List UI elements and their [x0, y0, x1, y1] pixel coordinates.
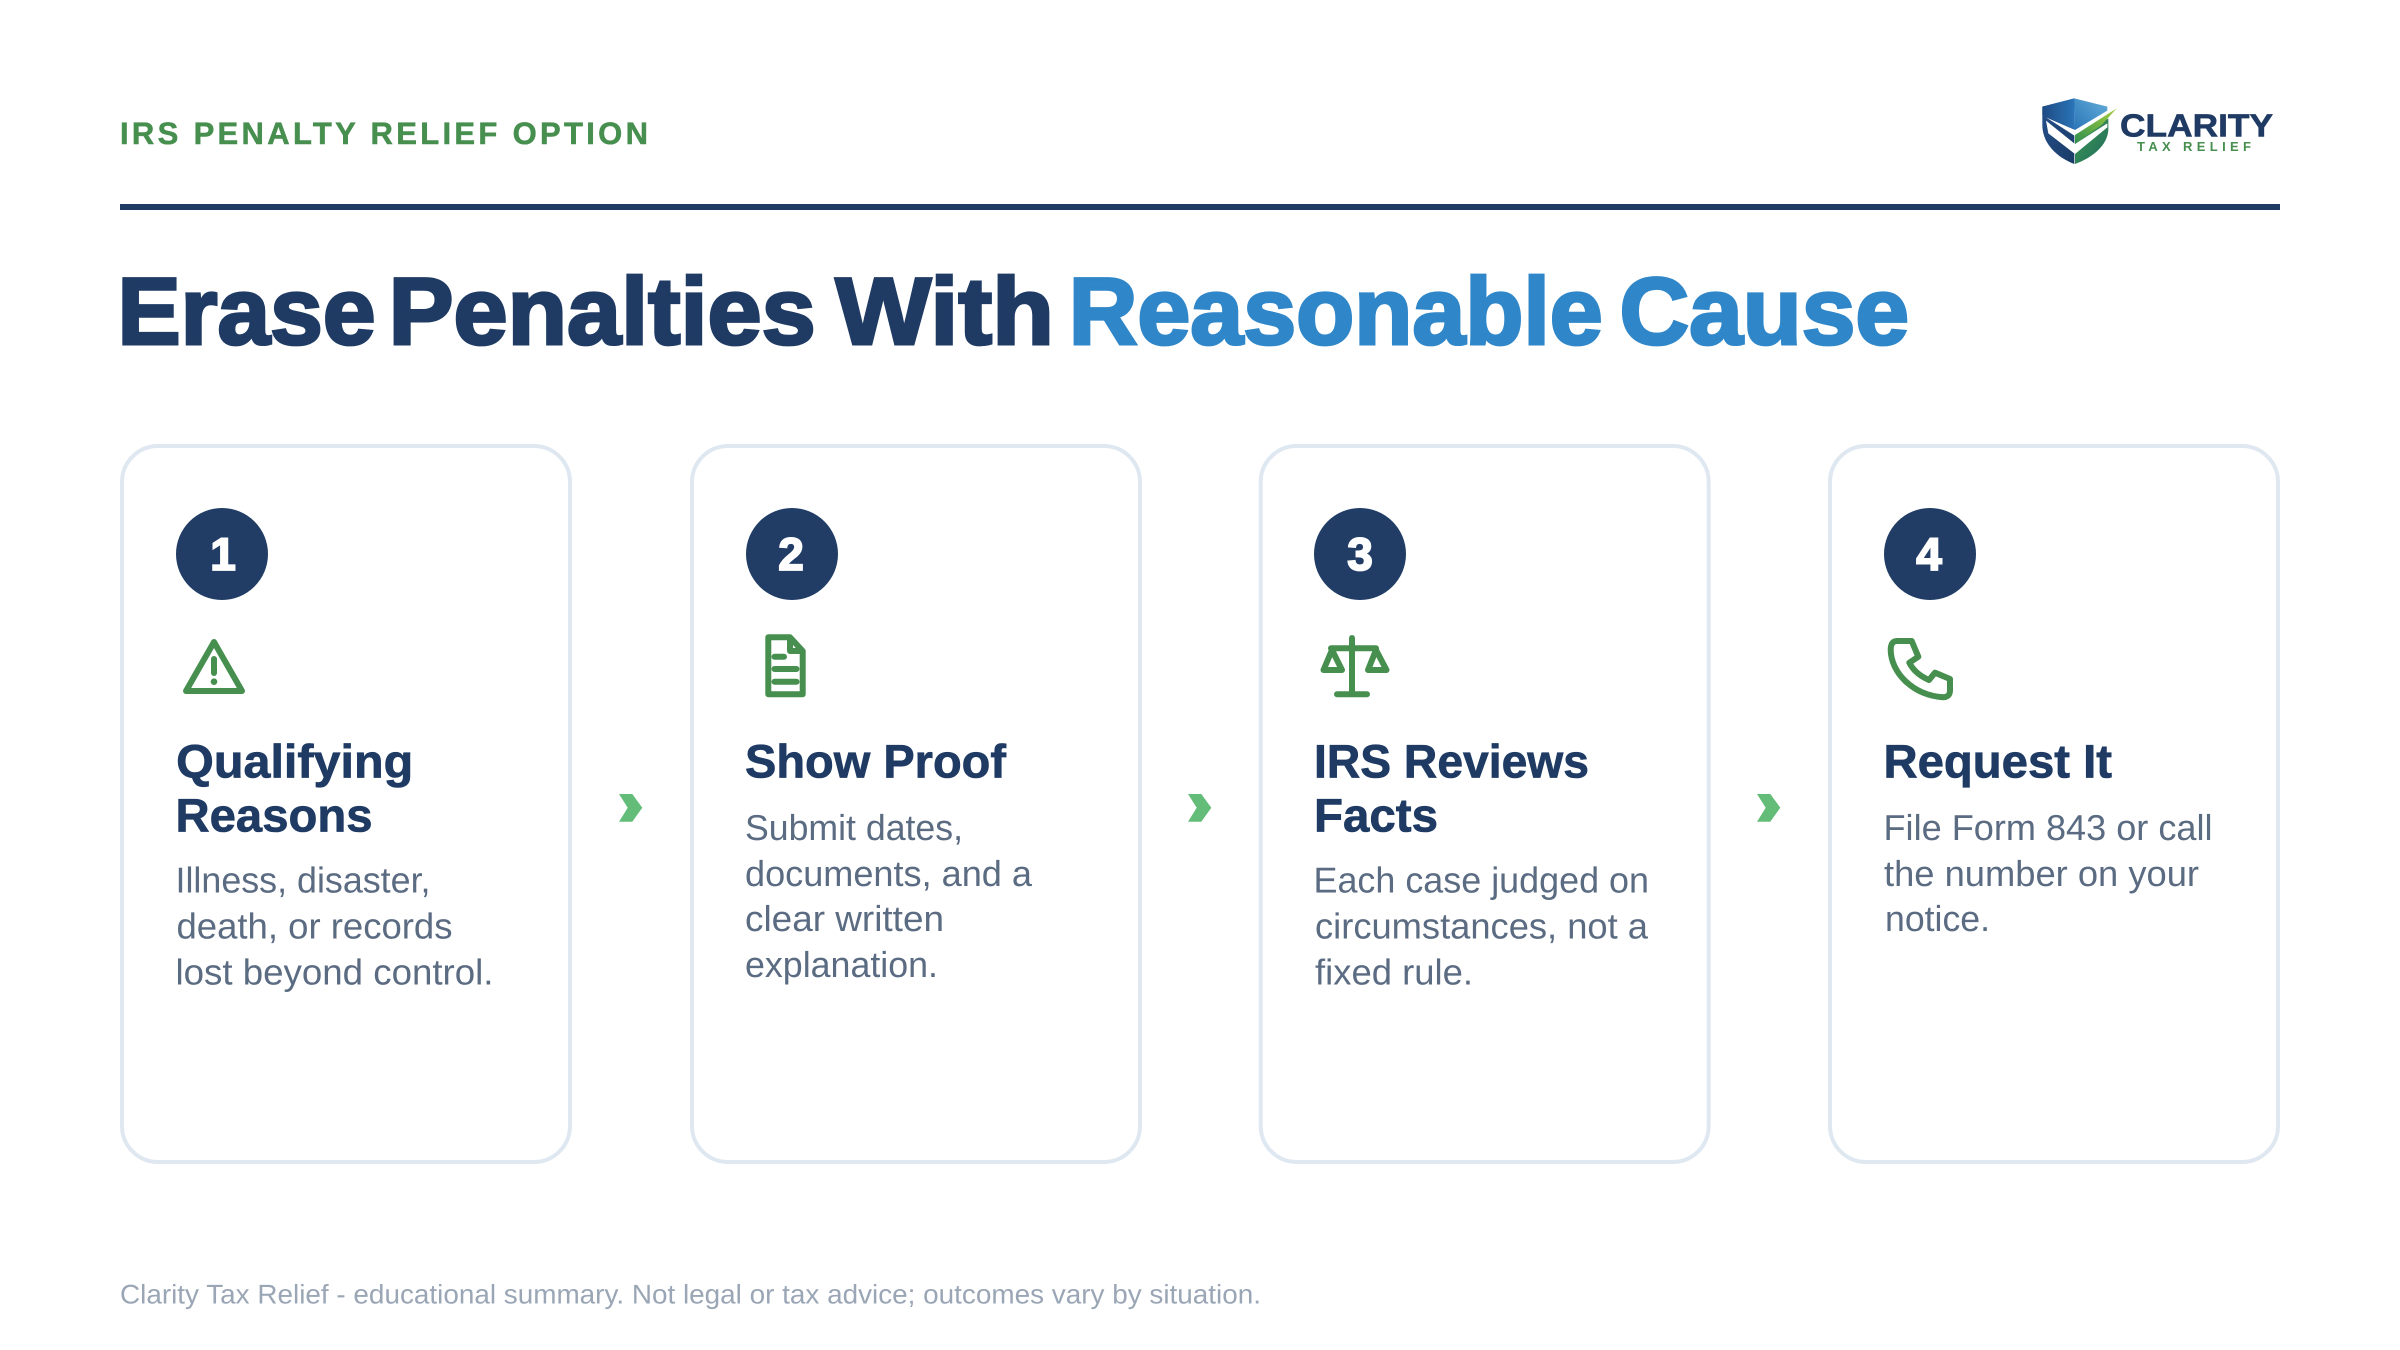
heading: Facts: [1314, 789, 1438, 842]
logo tagline: TAX RELIEF: [2137, 139, 2251, 154]
footer disclaimer: Clarity Tax Relief - educational summary. Not legal or tax advice; outcomes vary by situation.: [120, 1279, 1261, 1309]
description: Illness, disaster,: [176, 859, 430, 900]
logo wordmark: CLARITY: [2120, 108, 2273, 144]
panel: step 3 IRS reviews facts: [1261, 446, 1709, 1162]
title: word Erase: Erase: [118, 259, 376, 365]
card outline: [692, 446, 1140, 1162]
description: notice.: [1885, 898, 1990, 939]
description: [1884, 807, 2212, 939]
heading: IRS Reviews: [1314, 735, 1589, 788]
title: [118, 259, 1909, 365]
title: word Reasonable: Reasonable: [1069, 259, 1603, 365]
step number 1: 1: [210, 528, 236, 580]
description: documents, and a: [745, 853, 1033, 894]
step number 2: 2: [778, 528, 804, 580]
arrow 3: [1757, 794, 1780, 822]
description: explanation.: [745, 944, 938, 985]
description: death, or records: [176, 905, 452, 946]
panel: step 2 show proof: [692, 446, 1140, 1162]
description: [745, 807, 1033, 985]
eyebrow label: IRS PENALTY RELIEF OPTION: [120, 116, 648, 151]
title: word Penalties: Penalties: [389, 259, 816, 365]
icon: document: [768, 637, 803, 694]
arrow 1: [619, 794, 642, 822]
panel: step 1 qualifying reasons: [122, 446, 570, 1162]
description: Each case judged on: [1314, 859, 1649, 900]
card outline: [1261, 446, 1709, 1162]
description: Submit dates,: [745, 807, 963, 848]
heading: [176, 735, 413, 842]
arrow 2: [1188, 794, 1211, 822]
step number 3: [1314, 508, 1406, 600]
heading: Reasons: [176, 789, 372, 842]
title: word With: With: [836, 259, 1054, 365]
title: word Cause: Cause: [1620, 259, 1909, 365]
step number 1: [176, 508, 268, 600]
panel: step 4 request it: [1830, 446, 2278, 1162]
heading: [1314, 735, 1589, 842]
description: [176, 859, 494, 992]
step number 3: 3: [1347, 528, 1373, 580]
description: the number on your: [1884, 853, 2199, 894]
logo: Clarity Tax Relief: [2042, 98, 2273, 164]
step number 4: [1884, 508, 1976, 600]
icon: shield: [2042, 98, 2117, 164]
description: clear written: [745, 898, 944, 939]
heading: Show Proof: [745, 735, 1006, 788]
icon: balance scales: [1324, 638, 1386, 694]
description: [1314, 859, 1649, 992]
description: fixed rule.: [1315, 951, 1473, 992]
description: circumstances, not a: [1315, 905, 1649, 946]
step number 2: [746, 508, 838, 600]
card outline: [122, 446, 570, 1162]
heading: Qualifying: [176, 735, 413, 788]
icon: phone: [1891, 641, 1950, 697]
heading: Request It: [1884, 735, 2112, 788]
step number 4: 4: [1916, 528, 1942, 580]
description: File Form 843 or call: [1884, 807, 2212, 848]
card outline: [1830, 446, 2278, 1162]
icon: warning triangle: [186, 642, 242, 691]
description: lost beyond control.: [176, 951, 494, 992]
header rule: [120, 204, 2280, 210]
